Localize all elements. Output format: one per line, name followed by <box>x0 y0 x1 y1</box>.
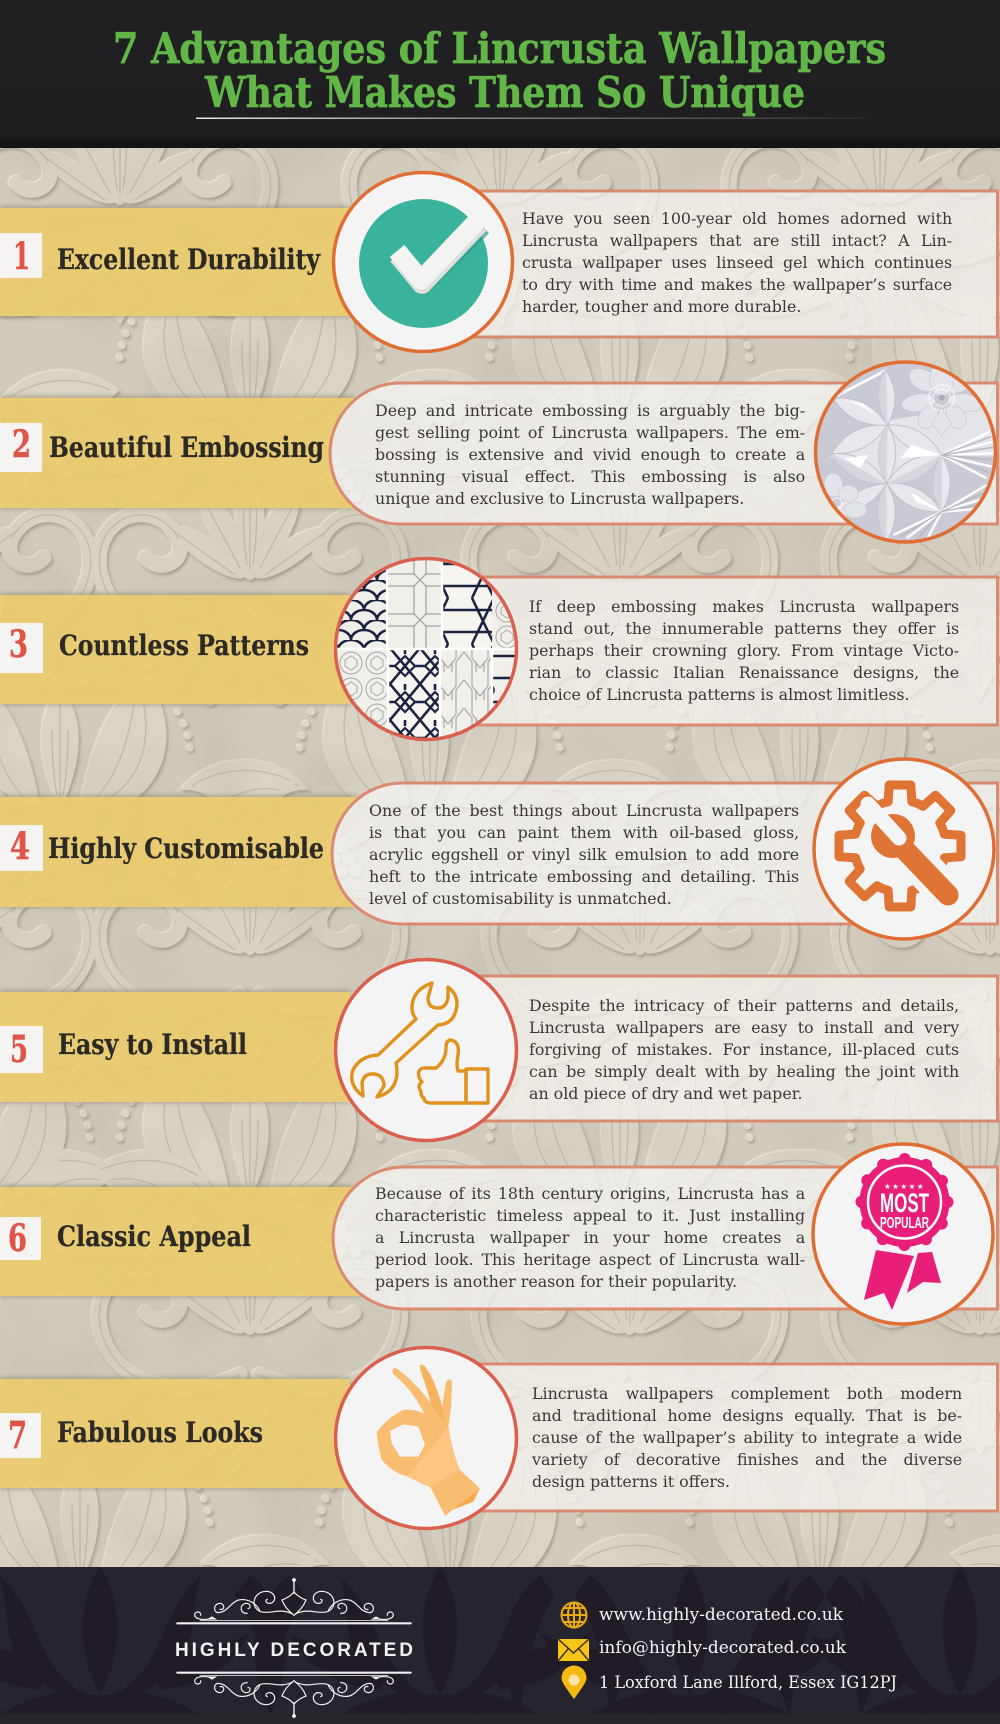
number 1: 1 <box>13 234 30 278</box>
title: What Makes Them So Unique <box>204 68 805 117</box>
text 6 <box>375 1183 825 1299</box>
number 3 <box>0 622 43 673</box>
text 1: Lincrusta wallpapers that are still intact? A Lin- <box>522 231 952 250</box>
panel 5 <box>440 976 998 1121</box>
text 2: unique and exclusive to Lincrusta wallpapers. <box>375 489 744 508</box>
row 5: Easy to Install <box>0 960 998 1140</box>
text 4: level of customisability is unmatched. <box>369 889 672 908</box>
title <box>113 24 886 117</box>
text 7 <box>532 1383 982 1499</box>
band 4 <box>0 795 360 908</box>
text 1: harder, tougher and more durable. <box>522 297 801 316</box>
text 2: gest selling point of Lincrusta wallpapers. The em- <box>375 423 805 442</box>
header bar <box>0 0 1000 148</box>
title underline <box>196 118 867 119</box>
icon: map pin <box>562 1665 586 1699</box>
row 4: Highly Customisable <box>0 759 998 939</box>
icon: embossed relief image <box>810 360 1000 550</box>
band 5 <box>0 990 350 1103</box>
text 3: rian to classic Italian Renaissance designs, the <box>529 663 959 682</box>
icon: pattern swatches <box>335 558 523 740</box>
number 6 <box>0 1216 41 1260</box>
icon: most popular ribbon badge: POPULAR <box>880 1215 929 1232</box>
heading 6: Classic Appeal <box>57 1220 251 1253</box>
text 4: acrylic eggshell or vinyl silk emulsion to add more <box>369 845 799 864</box>
text 4: heft to the intricate embossing and detailing. This <box>369 867 799 886</box>
icon: OK hand <box>336 1348 516 1528</box>
logo top ornament <box>177 1578 411 1623</box>
heading 4: Highly Customisable <box>48 832 324 865</box>
row 3: Countless Patterns <box>0 558 998 740</box>
band 3 <box>0 593 350 705</box>
logo wordmark: HIGHLY DECORATED <box>175 1640 413 1661</box>
text 6: papers is another reason for their popularity. <box>375 1272 737 1291</box>
text 1: crusta wallpaper uses linseed gel which continues <box>522 253 952 272</box>
panel 4 <box>332 783 997 924</box>
text 2: Deep and intricate embossing is arguably the big- <box>375 401 805 420</box>
text 7: design patterns it offers. <box>532 1472 730 1491</box>
heading 1: Excellent Durability <box>57 243 321 276</box>
text 3: stand out, the innumerable patterns they offer is <box>529 619 959 638</box>
number 2: 2 <box>12 422 31 466</box>
row 1: Excellent Durability <box>0 172 998 352</box>
band 7 <box>0 1377 350 1489</box>
text 2: bossing is extensive and vivid enough to create a <box>375 445 805 464</box>
panel 7 <box>440 1364 998 1511</box>
row 7: Fabulous Looks <box>0 1348 998 1528</box>
text 6: a Lincrusta wallpaper in your home creates a <box>375 1228 805 1247</box>
text 1 <box>522 208 972 324</box>
text 7: and traditional home designs equally. That is be- <box>532 1406 962 1425</box>
number 1 <box>0 233 42 278</box>
panel 2 <box>330 383 998 524</box>
text 3: perhaps their crowning glory. From vintage Victo- <box>529 641 959 660</box>
text 1: Have you seen 100-year old homes adorned with <box>522 209 952 228</box>
number 7: 7 <box>8 1413 27 1457</box>
contact: website: www.highly-decorated.co.uk <box>599 1605 844 1625</box>
icon: envelope <box>558 1639 589 1661</box>
contact: address <box>562 1665 897 1699</box>
number 3: 3 <box>9 622 28 666</box>
panel 3 <box>440 577 998 725</box>
contact: website <box>562 1602 844 1628</box>
text 6: characteristic timeless appeal to it. Just installing <box>375 1206 805 1225</box>
text 7: Lincrusta wallpapers complement both modern <box>532 1384 962 1403</box>
number 6: 6 <box>8 1216 27 1260</box>
panel 1 <box>440 191 998 337</box>
icon: most popular ribbon badge: MOST <box>880 1188 929 1218</box>
band 6 <box>0 1185 363 1297</box>
icon: most popular ribbon badge <box>813 1144 993 1324</box>
contact: address: 1 Loxford Lane Illford, Essex IG12PJ <box>599 1673 897 1693</box>
logo: Highly Decorated <box>175 1578 413 1718</box>
text 4 <box>369 800 819 916</box>
number 5 <box>0 1026 43 1073</box>
text 5: Lincrusta wallpapers are easy to install and very <box>529 1018 959 1037</box>
contact: email: info@highly-decorated.co.uk <box>599 1638 847 1658</box>
text 5: forgiving of mistakes. For instance, ill-placed cuts <box>529 1040 959 1059</box>
text 4: is that you can paint them with oil-based gloss, <box>369 823 799 842</box>
row 2: Beautiful Embossing <box>0 360 1000 550</box>
icon: gear and wrench <box>814 759 994 939</box>
number 4 <box>0 824 43 871</box>
heading 7: Fabulous Looks <box>57 1416 263 1449</box>
text 5: can be simply dealt with by healing the joint with <box>529 1062 959 1081</box>
title: 7 Advantages of Lincrusta Wallpapers <box>113 24 886 73</box>
text 4: One of the best things about Lincrusta wallpapers <box>369 801 799 820</box>
text 2: stunning visual effect. This embossing is also <box>375 467 805 486</box>
text 5 <box>529 995 979 1111</box>
heading 2: Beautiful Embossing <box>49 431 324 464</box>
heading 5: Easy to Install <box>58 1028 247 1061</box>
band 2 <box>0 396 357 509</box>
number 5: 5 <box>10 1027 28 1071</box>
panel 6 <box>333 1167 998 1309</box>
text 2 <box>375 400 825 516</box>
heading 3: Countless Patterns <box>59 629 309 662</box>
row 6: Classic Appeal <box>0 1144 998 1324</box>
text 3: choice of Lincrusta patterns is almost limitless. <box>529 685 910 704</box>
text 3 <box>529 596 979 712</box>
footer background <box>0 1567 1000 1724</box>
icon: most popular ribbon badge: ★★★★★ <box>884 1182 925 1191</box>
text 7: variety of decorative finishes and the diverse <box>532 1450 962 1469</box>
text 5: Despite the intricacy of their patterns and details, <box>529 996 959 1015</box>
text 7: cause of the wallpaper’s ability to integrate a wide <box>532 1428 962 1447</box>
icon: globe <box>562 1602 586 1628</box>
text 1: to dry with time and makes the wallpaper’s surface <box>522 275 952 294</box>
icon: check mark badge <box>334 172 512 352</box>
text 3: If deep embossing makes Lincrusta wallpapers <box>529 597 959 616</box>
logo bottom ornament <box>177 1673 411 1718</box>
band 1 <box>0 206 350 317</box>
icon: wrench and thumbs up <box>336 960 516 1140</box>
number 7 <box>0 1413 41 1458</box>
number 4: 4 <box>10 824 30 868</box>
text 6: Because of its 18th century origins, Lincrusta has a <box>375 1184 805 1203</box>
text 6: period look. This heritage aspect of Lincrusta wall- <box>375 1250 805 1269</box>
number 2 <box>0 422 42 472</box>
text 5: an old piece of dry and wet paper. <box>529 1084 803 1103</box>
